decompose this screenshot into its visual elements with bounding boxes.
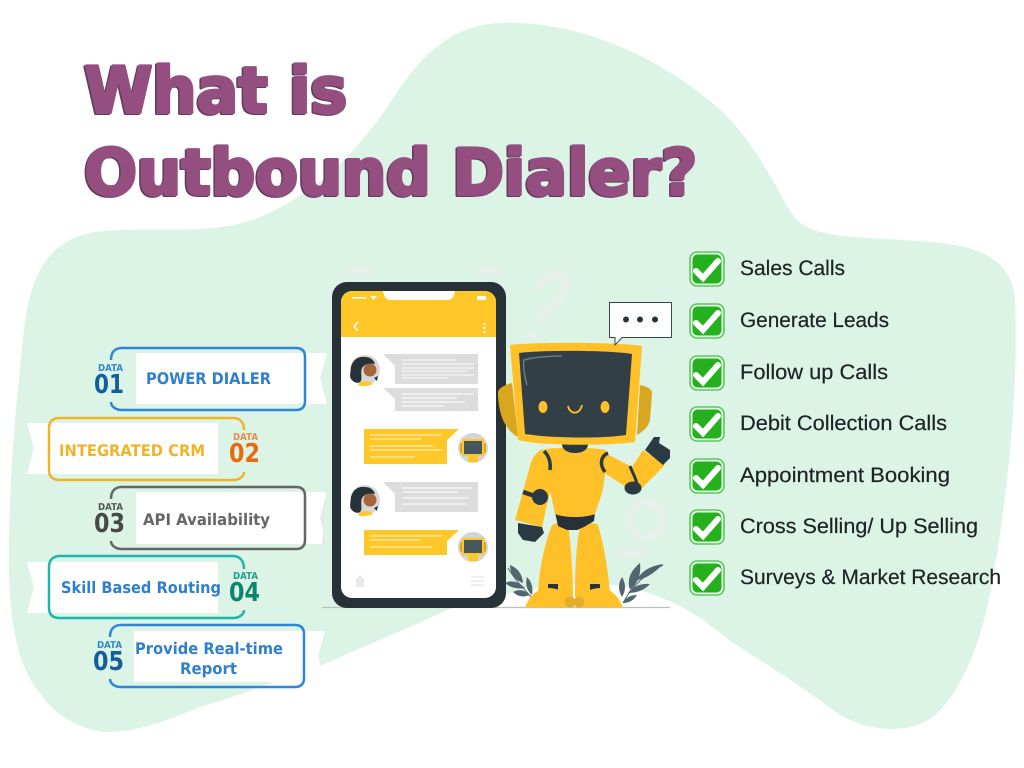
white ground patch	[506, 586, 672, 608]
data 02: INTEGRATED CRM	[59, 441, 205, 460]
phone status and nav icons	[352, 292, 486, 333]
robot screen glare	[524, 356, 562, 385]
robot feet	[525, 588, 623, 608]
list item: Generate Leads: Generate Leads	[740, 309, 889, 332]
list item: Follow up Calls	[690, 356, 888, 390]
list item: Generate Leads	[690, 304, 889, 338]
robot arm right	[603, 450, 665, 493]
data 01	[94, 348, 327, 410]
avatar: woman 2	[350, 485, 380, 516]
title: Outbound Dialer?	[83, 138, 696, 212]
chat bubble: yellow 2	[364, 530, 459, 555]
title	[83, 54, 698, 212]
list item: Cross Selling/ Up Selling: Cross Selling/ Up Selling	[740, 515, 978, 538]
data 04: Skill Based Routing	[61, 578, 221, 597]
feature list	[690, 252, 1001, 595]
list item: Surveys & Market Research: Surveys & Market Research	[740, 566, 1001, 589]
data 01: POWER DIALER	[146, 369, 271, 388]
data 01: DATA	[98, 363, 124, 374]
data 02	[27, 418, 260, 480]
robot torso	[544, 448, 606, 517]
chat bubble: gray 1	[383, 354, 478, 384]
list item: Debit Collection Calls: Debit Collection Calls	[740, 412, 947, 435]
speech bubble	[610, 302, 672, 345]
title: What is	[83, 56, 346, 130]
robot ears	[498, 383, 652, 437]
robot	[498, 343, 670, 608]
list item: Appointment Booking	[690, 459, 950, 493]
data 05: 05	[93, 647, 124, 677]
avatar: robot 2	[458, 532, 488, 562]
data 02: 02	[229, 439, 260, 469]
data 05: Provide Real-time	[135, 639, 283, 658]
title: What is	[84, 54, 348, 128]
list item: Follow up Calls: Follow up Calls	[740, 361, 888, 384]
list item: Cross Selling/ Up Selling	[690, 510, 978, 544]
data 04	[27, 556, 260, 618]
chat bubble: yellow 1	[364, 429, 459, 464]
robot face	[538, 401, 610, 413]
list item: Appointment Booking: Appointment Booking	[740, 464, 950, 487]
robot arm left	[515, 449, 552, 527]
robot left leg	[538, 523, 573, 597]
avatar: woman 1	[350, 355, 380, 386]
data 03	[94, 487, 327, 549]
data 03: 03	[94, 509, 125, 539]
menu icon	[471, 577, 484, 585]
data 05: Report	[180, 659, 237, 678]
list item: Surveys & Market Research	[690, 561, 1001, 595]
chat bubble: gray 2	[383, 388, 478, 411]
chat bubble: gray 3	[383, 482, 478, 512]
data items	[27, 348, 327, 687]
data 03: API Availability	[143, 510, 271, 529]
robot ankles	[548, 584, 600, 590]
data 04: 04	[229, 578, 260, 608]
list item: Sales Calls: Sales Calls	[740, 257, 845, 280]
robot screen	[519, 351, 632, 438]
data 02: DATA	[233, 432, 259, 443]
data 03: DATA	[98, 502, 124, 513]
phone header	[341, 291, 496, 337]
data 05: DATA	[97, 640, 123, 651]
robot head	[510, 343, 642, 445]
robot dark details	[518, 437, 670, 542]
robot right leg	[575, 523, 610, 597]
robot pelvis	[555, 512, 595, 530]
faint background symbols	[347, 270, 663, 553]
leaves	[505, 563, 663, 603]
ground line	[322, 606, 670, 608]
home icon	[354, 575, 366, 587]
list item: Sales Calls	[690, 252, 845, 286]
title: Outbound Dialer?	[84, 136, 698, 210]
data 05	[93, 625, 325, 687]
avatar: robot 1	[458, 433, 488, 463]
list item: Debit Collection Calls	[690, 407, 947, 441]
data 01: 01	[94, 370, 124, 400]
data 04: DATA	[233, 571, 259, 582]
phone	[332, 282, 506, 608]
